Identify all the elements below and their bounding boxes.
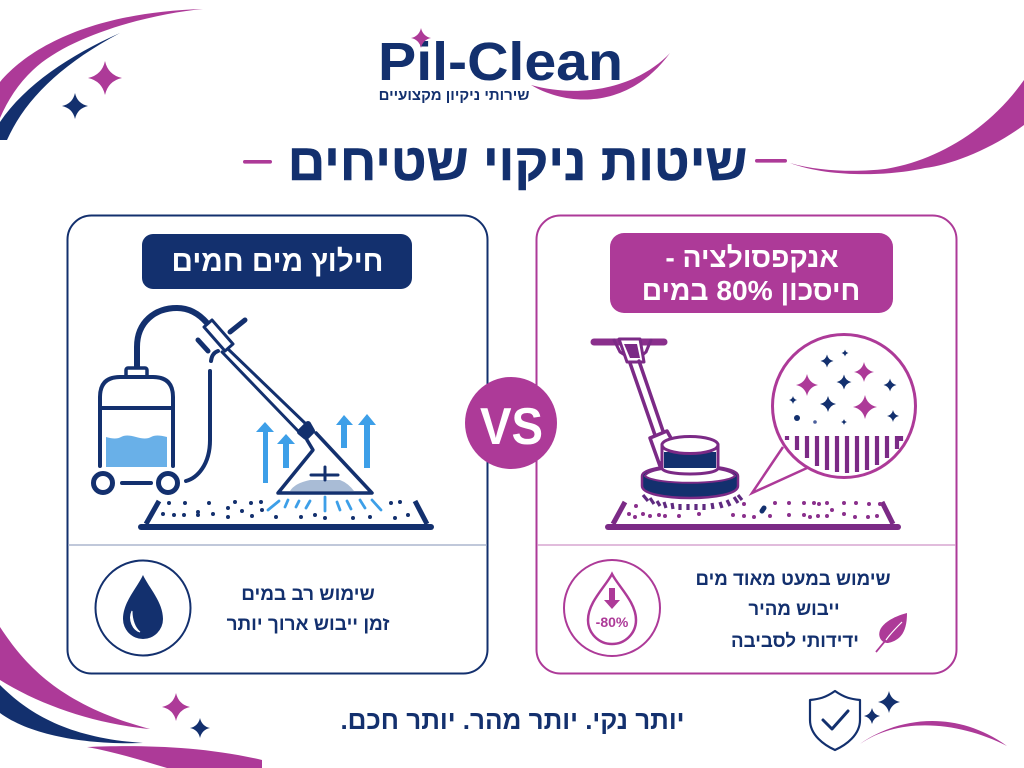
icon: -80% water drop xyxy=(564,560,660,656)
panel: hot water extraction xyxy=(68,216,488,674)
illustration: floor scrubber xyxy=(594,339,742,510)
top-right swoosh xyxy=(790,80,1024,174)
steam arrows xyxy=(256,414,376,483)
brush bristles xyxy=(643,495,742,510)
bottom-right sparkles xyxy=(864,691,900,724)
bottom-left sparkles xyxy=(162,693,210,738)
scrubber base xyxy=(642,466,738,498)
water tank xyxy=(94,368,178,492)
logo xyxy=(378,28,670,104)
bottom-right swoosh xyxy=(860,721,1007,746)
title: שיטות ניקוי שטיחים xyxy=(288,134,747,192)
benefits list: encapsulation: ייבוש מהיר xyxy=(748,598,840,619)
logo subtitle: שירותי ניקיון מקצועיים xyxy=(379,87,529,104)
bottom-left swoosh xyxy=(0,627,262,768)
illustration: extraction machine xyxy=(94,308,372,493)
carpet xyxy=(608,502,898,527)
heading: encapsulation: אנקפסולציה - xyxy=(665,241,839,273)
scrubber motor xyxy=(662,436,718,474)
tagline: יותר נקי. יותר מהר. יותר חכם. xyxy=(340,705,685,735)
VS badge: VS xyxy=(480,398,543,456)
sparkles xyxy=(789,350,899,425)
carpet fibres xyxy=(787,436,901,473)
top-left corner swoosh xyxy=(0,9,203,140)
benefits list: encapsulation: שימוש במעט מאוד מים xyxy=(695,568,891,589)
magnifier callout xyxy=(752,334,916,493)
benefits list: encapsulation xyxy=(695,568,891,651)
logo sparkle xyxy=(411,28,431,48)
panel: encapsulation xyxy=(536,216,956,674)
benefits list: encapsulation: ידידותי לסביבה xyxy=(731,630,859,651)
top-left sparkles xyxy=(62,61,122,119)
logo wordmark: Pil-Clean xyxy=(378,32,623,92)
benefits list: extraction: שימוש רב במים xyxy=(241,584,375,605)
carpet xyxy=(141,501,431,527)
hose xyxy=(137,308,218,481)
icon: leaf xyxy=(876,613,907,652)
handle xyxy=(594,339,672,466)
icon: water drop xyxy=(96,560,190,656)
logo swoosh xyxy=(531,53,670,100)
heading: hot water extraction: חילוץ מים חמים xyxy=(172,245,383,278)
heading: encapsulation: חיסכון 80% במים xyxy=(642,274,860,306)
heading: hot water extraction xyxy=(142,234,412,289)
VS badge xyxy=(465,377,557,469)
icon: -80% water drop: -80% xyxy=(596,614,629,630)
benefits list: extraction: זמן ייבוש ארוך יותר xyxy=(227,614,389,635)
benefits list: extraction xyxy=(227,584,389,635)
wand xyxy=(198,320,312,437)
icon: shield with check xyxy=(810,691,860,750)
water spray xyxy=(268,497,381,511)
triangular nozzle xyxy=(278,433,372,493)
heading: encapsulation xyxy=(610,233,893,313)
